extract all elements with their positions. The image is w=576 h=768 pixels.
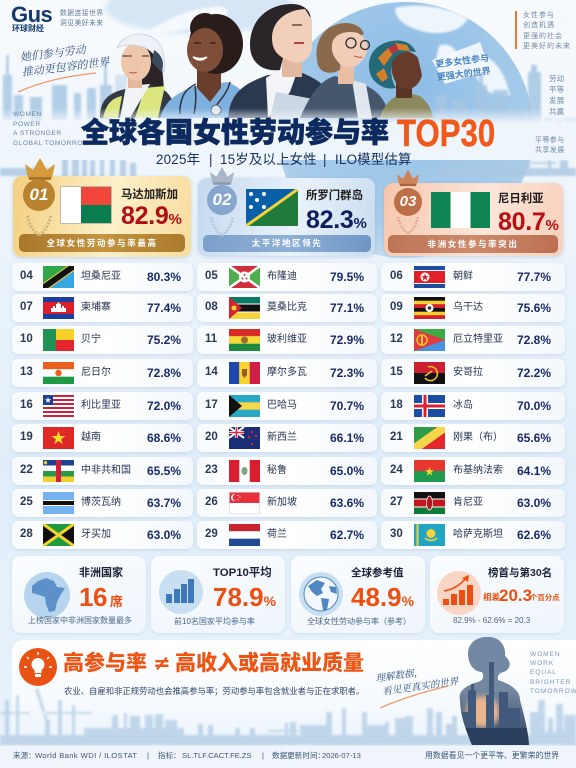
medal circle: 01 bbox=[30, 185, 48, 204]
row 04 Tanzania bbox=[12, 263, 193, 291]
row 07 Cambodia bbox=[12, 294, 193, 322]
person: businesswoman with laptop bbox=[228, 4, 342, 118]
flag: Niger bbox=[43, 362, 74, 384]
row 08 Mozambique: 08 bbox=[205, 301, 218, 313]
globe bbox=[105, 0, 576, 258]
bottom headline: ≠ bbox=[153, 651, 171, 675]
title: 全球各国女性劳动参与率 bbox=[81, 117, 389, 148]
row 12 Eritrea: 72.8% bbox=[517, 333, 551, 347]
row 22 Central African Republic bbox=[12, 457, 193, 485]
medal circle: 02 bbox=[213, 190, 231, 209]
row 20 New Zealand: 20 bbox=[205, 431, 218, 443]
keywords right: 平等 bbox=[549, 85, 565, 94]
footer tagline: 用数据看见一个更平等、更繁荣的世界 bbox=[425, 751, 559, 760]
medal 02 bbox=[207, 168, 237, 236]
flag: Burundi bbox=[229, 266, 260, 288]
subtitle: 2025年 bbox=[156, 152, 200, 167]
label: 非洲国家 bbox=[79, 567, 123, 579]
row 05 Burundi: 79.5% bbox=[330, 270, 364, 284]
orange accent curve left bbox=[18, 73, 96, 92]
bottom headline: 高参与率 bbox=[63, 652, 147, 675]
row 30 Kazakhstan: 30 bbox=[390, 528, 403, 540]
row 14 Moldova bbox=[197, 359, 377, 387]
row 21 Congo: 65.6% bbox=[517, 431, 551, 445]
row 29 Netherlands: 29 bbox=[205, 528, 218, 540]
row 29 Netherlands bbox=[197, 521, 377, 549]
row 20 New Zealand: 新西兰 bbox=[267, 432, 297, 443]
row 08 Mozambique: 77.1% bbox=[330, 301, 364, 315]
row 08 Mozambique bbox=[197, 294, 377, 322]
row 17 Bahamas: 巴哈马 bbox=[267, 400, 297, 411]
row 12 Eritrea: 12 bbox=[390, 333, 403, 345]
tagline right with orange bar: 更强的社会 bbox=[523, 33, 563, 40]
row 06 North Korea: 06 bbox=[390, 270, 403, 282]
flag: Nigeria bbox=[431, 192, 490, 228]
flag: Cambodia bbox=[43, 297, 74, 319]
stat card: Top 10 average bbox=[151, 556, 285, 633]
row 28 Jamaica: 28 bbox=[20, 528, 33, 540]
row 16 Liberia bbox=[12, 392, 193, 420]
crown silver bbox=[210, 168, 234, 185]
keywords right lower: 共享发展 bbox=[535, 147, 565, 154]
footer source: SL.TLF.CACT.FE.ZS bbox=[182, 751, 252, 760]
row 23 Peru bbox=[197, 457, 377, 485]
row 27 Kenya: 27 bbox=[390, 496, 403, 508]
row 12 Eritrea bbox=[381, 326, 565, 354]
row 22 Central African Republic: 22 bbox=[20, 464, 33, 476]
ribbon bbox=[203, 235, 371, 252]
row 30 Kazakhstan bbox=[381, 521, 565, 549]
english tagline left: GLOBAL TOMORROW bbox=[13, 140, 90, 147]
flag: Angola bbox=[414, 362, 445, 384]
value: 78.9% bbox=[213, 582, 276, 612]
row 23 Peru: 23 bbox=[205, 464, 218, 476]
medal 03 bbox=[394, 170, 422, 234]
script slogan left: 推动更包容的世界 bbox=[21, 53, 110, 80]
row 26 Singapore: 63.6% bbox=[330, 496, 364, 510]
english words right: WORK bbox=[530, 660, 554, 667]
flag: Peru bbox=[229, 460, 260, 482]
logo tagline: 数据连接世界 bbox=[60, 10, 104, 17]
flag: Solomon Islands bbox=[246, 189, 298, 226]
row 05 Burundi: 布隆迪 bbox=[267, 271, 297, 282]
row 24 Burkina Faso: 布基纳法索 bbox=[453, 465, 503, 476]
row 09 Uganda: 乌干达 bbox=[453, 302, 483, 313]
row 04 Tanzania: 80.3% bbox=[147, 270, 181, 284]
subtitle: 15岁及以上女性 bbox=[220, 152, 317, 167]
row 14 Moldova: 14 bbox=[205, 366, 218, 378]
english tagline left: POWER bbox=[13, 121, 41, 128]
row 26 Singapore: 新加坡 bbox=[267, 497, 297, 508]
row 28 Jamaica: 63.0% bbox=[147, 528, 181, 542]
row 10 Benin bbox=[12, 326, 193, 354]
row 25 Botswana bbox=[12, 489, 193, 517]
keywords right bbox=[549, 74, 565, 116]
value: 16席 bbox=[79, 582, 122, 612]
subtitle: ILO模型估算 bbox=[335, 152, 412, 167]
value: 82.9% bbox=[121, 202, 182, 230]
english words right: BRIGHTER bbox=[530, 679, 571, 686]
flag: Madagascar bbox=[60, 186, 112, 224]
bottom headline: 高收入或高就业质量 bbox=[175, 652, 364, 675]
icon: bar chart bbox=[159, 570, 203, 614]
row 14 Moldova: 摩尔多瓦 bbox=[267, 367, 307, 378]
value bbox=[483, 586, 561, 606]
flag: Eritrea bbox=[414, 329, 445, 351]
medal circle bbox=[207, 185, 237, 215]
row 21 Congo: 21 bbox=[390, 431, 403, 443]
english tagline left: A STRONGER bbox=[13, 130, 62, 137]
logo: Gus bbox=[11, 2, 52, 27]
row 13 Niger bbox=[12, 359, 193, 387]
orange accent curve right bbox=[380, 686, 448, 708]
skyline: left bbox=[3, 55, 127, 122]
flag: Kazakhstan bbox=[414, 524, 445, 546]
ribbon: 非洲女性参与率突出 bbox=[428, 239, 518, 249]
name: 尼日利亚 bbox=[498, 193, 544, 205]
script slogan left: 她们参与劳动 bbox=[19, 41, 87, 65]
label: TOP10平均 bbox=[213, 567, 272, 579]
medal circle bbox=[394, 188, 422, 216]
subtitle: | bbox=[209, 152, 213, 167]
laurel bbox=[26, 216, 52, 236]
logo tagline: 洞见美好未来 bbox=[60, 20, 104, 27]
row 16 Liberia: 72.0% bbox=[147, 399, 181, 413]
keywords right: 劳动 bbox=[549, 74, 565, 83]
row 20 New Zealand bbox=[197, 424, 377, 452]
row 16 Liberia: 16 bbox=[20, 399, 33, 411]
icon: light bulb bbox=[19, 648, 57, 686]
flag: Singapore bbox=[229, 492, 260, 514]
top card: rank 2 Solomon Islands bbox=[198, 178, 375, 256]
row 09 Uganda bbox=[381, 294, 565, 322]
lower panel base bbox=[12, 640, 576, 750]
english words right: WOMEN bbox=[530, 651, 561, 658]
row 19 Vietnam: 19 bbox=[20, 431, 33, 443]
row 13 Niger: 13 bbox=[20, 366, 33, 378]
medal 01 bbox=[23, 158, 55, 236]
row 18 Iceland: 18 bbox=[390, 399, 403, 411]
row 24 Burkina Faso: 64.1% bbox=[517, 464, 551, 478]
value: 20.3 bbox=[499, 586, 532, 605]
flag: Central African Republic bbox=[43, 460, 74, 482]
laurel bbox=[210, 217, 234, 236]
icon: rising bars bbox=[437, 571, 481, 615]
globe tag bbox=[432, 42, 490, 84]
row 29 Netherlands: 62.7% bbox=[330, 528, 364, 542]
keywords right: 发展 bbox=[549, 96, 565, 105]
script note right: 看见更真实的世界 bbox=[381, 673, 459, 698]
row 19 Vietnam: 越南 bbox=[81, 432, 101, 443]
row 30 Kazakhstan: 哈萨克斯坦 bbox=[453, 529, 503, 540]
ribbon bbox=[388, 235, 558, 253]
row 24 Burkina Faso: 24 bbox=[390, 464, 403, 476]
row 11 Bolivia: 玻利维亚 bbox=[267, 334, 307, 345]
row 17 Bahamas: 70.7% bbox=[330, 399, 364, 413]
row 14 Moldova: 72.3% bbox=[330, 366, 364, 380]
row 27 Kenya: 63.0% bbox=[517, 496, 551, 510]
person: engineer in hard hat bbox=[100, 34, 176, 118]
title bbox=[80, 113, 495, 155]
globe caption: 更强大的世界 bbox=[436, 66, 491, 82]
flag: New Zealand bbox=[229, 427, 260, 449]
flag: Iceland bbox=[414, 395, 445, 417]
english words right bbox=[530, 650, 576, 696]
flag: Botswana bbox=[43, 492, 74, 514]
row 10 Benin: 贝宁 bbox=[81, 334, 101, 345]
skyline: right bbox=[436, 65, 576, 134]
flag: Netherlands bbox=[229, 524, 260, 546]
stat card: African countries bbox=[12, 556, 146, 633]
row 06 North Korea bbox=[381, 263, 565, 291]
row 04 Tanzania: 04 bbox=[20, 270, 33, 282]
woman silhouette filled with city bbox=[455, 637, 530, 745]
value: 个百分点 bbox=[530, 593, 560, 602]
row 12 Eritrea: 厄立特里亚 bbox=[453, 334, 503, 345]
flag: Congo bbox=[414, 427, 445, 449]
note: 全球女性劳动参与率（参考） bbox=[307, 617, 411, 626]
ribbon: 太平洋地区领先 bbox=[252, 238, 322, 248]
ribbon bbox=[19, 234, 185, 252]
person: woman in patterned turban bbox=[369, 41, 433, 118]
flag: Vietnam bbox=[43, 427, 74, 449]
row 25 Botswana: 博茨瓦纳 bbox=[81, 497, 121, 508]
row 06 North Korea: 77.7% bbox=[517, 270, 551, 284]
row 13 Niger: 72.8% bbox=[147, 366, 181, 380]
row 21 Congo bbox=[381, 424, 565, 452]
row 07 Cambodia: 07 bbox=[20, 301, 33, 313]
flag: Tanzania bbox=[43, 266, 74, 288]
footer source: 指标： bbox=[158, 751, 181, 760]
footer source: World Bank WDI / ILOSTAT bbox=[35, 751, 137, 760]
name: 马达加斯加 bbox=[121, 189, 178, 201]
footer source: 来源： bbox=[13, 751, 36, 760]
row 28 Jamaica bbox=[12, 521, 193, 549]
note: 上榜国家中非洲国家数量最多 bbox=[28, 616, 132, 625]
row 22 Central African Republic: 中非共和国 bbox=[81, 465, 131, 476]
top card: rank 1 Madagascar bbox=[13, 176, 191, 257]
row 15 Angola bbox=[381, 359, 565, 387]
row 15 Angola: 72.2% bbox=[517, 366, 551, 380]
row 26 Singapore bbox=[197, 489, 377, 517]
english words right: EQUAL bbox=[530, 669, 557, 676]
keywords right: 共赢 bbox=[549, 107, 565, 116]
row 15 Angola: 15 bbox=[390, 366, 403, 378]
footer source: 2026-07-13 bbox=[322, 751, 361, 760]
value: 82.3% bbox=[306, 206, 367, 234]
footer source bbox=[13, 752, 373, 762]
stat card: global reference bbox=[291, 556, 425, 633]
row 26 Singapore: 26 bbox=[205, 496, 218, 508]
crown gold bbox=[25, 158, 55, 180]
name: 所罗门群岛 bbox=[306, 190, 363, 202]
row 19 Vietnam: 68.6% bbox=[147, 431, 181, 445]
value: 48.9% bbox=[351, 582, 414, 612]
english tagline left bbox=[13, 111, 90, 147]
row 23 Peru: 65.0% bbox=[330, 464, 364, 478]
icon: globe bbox=[299, 572, 343, 616]
top card: rank 3 Nigeria bbox=[384, 183, 563, 256]
globe caption bbox=[435, 53, 491, 82]
icon: Africa map bbox=[24, 572, 70, 618]
keywords right lower: 平等参与 bbox=[535, 137, 565, 144]
flag: Uganda bbox=[414, 297, 445, 319]
laurel bbox=[397, 217, 419, 234]
row 20 New Zealand: 66.1% bbox=[330, 431, 364, 445]
flag: Kenya bbox=[414, 492, 445, 514]
medal circle: 03 bbox=[400, 193, 416, 210]
row 17 Bahamas bbox=[197, 392, 377, 420]
crown bronze bbox=[397, 170, 419, 186]
subtitle bbox=[156, 152, 412, 167]
skyline and port under subtitle bbox=[0, 150, 576, 177]
script note right bbox=[374, 659, 459, 699]
flag: Mozambique bbox=[229, 297, 260, 319]
row 07 Cambodia: 柬埔寨 bbox=[81, 302, 111, 313]
flag: Moldova bbox=[229, 362, 260, 384]
flag: Jamaica bbox=[43, 524, 74, 546]
row 06 North Korea: 朝鲜 bbox=[453, 271, 473, 282]
row 19 Vietnam bbox=[12, 424, 193, 452]
flag: North Korea bbox=[414, 266, 445, 288]
row 23 Peru: 秘鲁 bbox=[267, 465, 287, 476]
bottom headline bbox=[63, 653, 367, 675]
row 09 Uganda: 09 bbox=[390, 301, 403, 313]
footer source: 数据更新时间： bbox=[272, 751, 325, 760]
subtitle: | bbox=[323, 152, 327, 167]
medal circle bbox=[23, 179, 55, 211]
person: woman with glasses bbox=[300, 23, 390, 118]
stat card: gap between first and last bbox=[430, 556, 564, 633]
label: 榜首与第30名 bbox=[488, 567, 552, 579]
row 24 Burkina Faso bbox=[381, 457, 565, 485]
row 18 Iceland: 70.0% bbox=[517, 399, 551, 413]
row 18 Iceland bbox=[381, 392, 565, 420]
footer source: | bbox=[262, 751, 264, 760]
person: nurse with stethoscope bbox=[160, 13, 250, 118]
row 10 Benin: 10 bbox=[20, 333, 33, 345]
row 22 Central African Republic: 65.5% bbox=[147, 464, 181, 478]
row 11 Bolivia: 72.9% bbox=[330, 333, 364, 347]
value: 80.7% bbox=[498, 208, 559, 236]
flag: Bolivia bbox=[229, 329, 260, 351]
row 15 Angola: 安哥拉 bbox=[453, 367, 483, 378]
script note right: 理解数据， bbox=[374, 664, 424, 685]
flag: Bahamas bbox=[229, 395, 260, 417]
row 30 Kazakhstan: 62.6% bbox=[517, 528, 551, 542]
port and city scene in lower panel bbox=[0, 688, 576, 745]
flag: Burkina Faso bbox=[414, 460, 445, 482]
row 21 Congo: 刚果（布） bbox=[453, 432, 503, 443]
tagline right with orange bar: 更美好的未来 bbox=[523, 43, 571, 50]
tagline right with orange bar: 创造机遇 bbox=[523, 22, 555, 29]
bottom explanatory text: 农业、自雇和非正规劳动也会推高参与率；劳动参与率包含就业者与正在求职者。 bbox=[64, 686, 364, 696]
row 05 Burundi bbox=[197, 263, 377, 291]
row 07 Cambodia: 77.4% bbox=[147, 301, 181, 315]
flag: Benin bbox=[43, 329, 74, 351]
logo: 环球财经 bbox=[12, 24, 44, 33]
logo tagline bbox=[60, 9, 104, 27]
english tagline left: WOMEN bbox=[13, 111, 42, 118]
globe caption: 更多女性参与 bbox=[435, 53, 490, 69]
script slogan left bbox=[19, 41, 110, 80]
flag: Liberia bbox=[43, 395, 74, 417]
value: 相差 bbox=[483, 592, 500, 602]
ribbon: 全球女性劳动参与率最高 bbox=[46, 238, 158, 248]
row 09 Uganda: 75.6% bbox=[517, 301, 551, 315]
tagline right with orange bar: 女性参与 bbox=[523, 12, 555, 19]
fade under the people bbox=[0, 108, 576, 160]
row 27 Kenya: 肯尼亚 bbox=[453, 497, 483, 508]
row 17 Bahamas: 17 bbox=[205, 399, 218, 411]
row 08 Mozambique: 莫桑比克 bbox=[267, 302, 307, 313]
keywords right lower bbox=[535, 136, 565, 154]
row 04 Tanzania: 坦桑尼亚 bbox=[81, 271, 121, 282]
note: 82.9% - 62.6% = 20.3 bbox=[453, 616, 530, 625]
note: 前10名国家平均参与率 bbox=[174, 617, 255, 626]
footer source: | bbox=[147, 751, 149, 760]
row 28 Jamaica: 牙买加 bbox=[81, 529, 111, 540]
row 18 Iceland: 冰岛 bbox=[453, 400, 473, 411]
title: TOP30 bbox=[397, 113, 495, 155]
row 25 Botswana: 25 bbox=[20, 496, 33, 508]
row 27 Kenya bbox=[381, 489, 565, 517]
row 11 Bolivia: 11 bbox=[205, 333, 217, 345]
row 05 Burundi: 05 bbox=[205, 270, 218, 282]
row 13 Niger: 尼日尔 bbox=[81, 367, 111, 378]
row 25 Botswana: 63.7% bbox=[147, 496, 181, 510]
row 16 Liberia: 利比里亚 bbox=[81, 400, 121, 411]
row 29 Netherlands: 荷兰 bbox=[267, 529, 287, 540]
label: 全球参考值 bbox=[351, 567, 404, 579]
tagline right with orange bar bbox=[515, 11, 571, 49]
footer strip bbox=[0, 746, 576, 768]
row 10 Benin: 75.2% bbox=[147, 333, 181, 347]
row 11 Bolivia bbox=[197, 326, 377, 354]
